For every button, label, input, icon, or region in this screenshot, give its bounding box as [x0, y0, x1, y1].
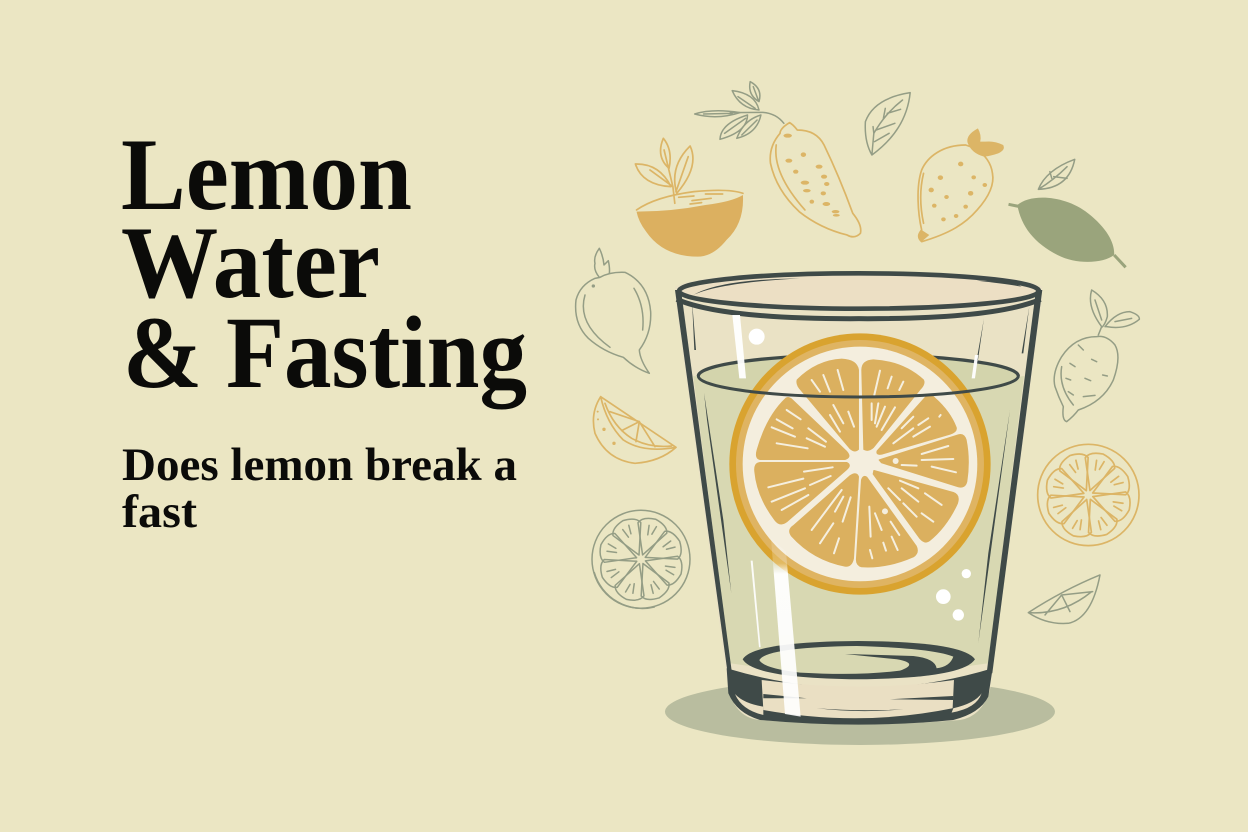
- water: [693, 376, 1024, 673]
- title: Water: [121, 206, 380, 320]
- bubbles: [749, 329, 971, 621]
- left botanical icons: [576, 248, 690, 608]
- icon: small leaf: [1038, 159, 1075, 189]
- glass body: [675, 297, 1042, 724]
- icon: long speckled fruit with leaves: [695, 82, 861, 237]
- title: & Fasting: [123, 296, 527, 410]
- title: [121, 118, 527, 410]
- icon: half lemon with sprout: [635, 138, 743, 257]
- icon: lemon with leaves: [1054, 290, 1139, 422]
- water surface front edge: [698, 376, 1018, 397]
- icon: orange slice outline: [1038, 444, 1139, 546]
- subtitle: [122, 439, 517, 538]
- lemon slice: [729, 333, 991, 595]
- subtitle: fast: [122, 486, 197, 538]
- glass outer walls: [675, 290, 1042, 673]
- icon: solid green leaf: [1009, 198, 1126, 267]
- right botanical icons: [1028, 290, 1139, 623]
- glass base: [727, 668, 993, 725]
- subtitle: Does lemon break a: [122, 439, 517, 491]
- water surface back edge: [698, 355, 1018, 376]
- icon: strawberry shaped fruit: [918, 128, 1004, 242]
- lemon segments: [755, 359, 968, 567]
- glass bottom oval: [743, 641, 975, 679]
- glass shadow: [665, 678, 1055, 745]
- title: Lemon: [121, 118, 412, 232]
- top botanical icons: [635, 82, 1126, 267]
- icon: lime slice outline: [592, 510, 690, 608]
- glass highlights: [732, 315, 978, 717]
- inner glass shading lines: [692, 300, 1029, 643]
- icon: lemon wedge gold: [593, 397, 676, 463]
- icon: lime wedge outline: [1028, 575, 1100, 623]
- lemon pulp ticks: [768, 370, 956, 558]
- icon: outlined leaf: [865, 93, 910, 155]
- glass rim: [675, 271, 1042, 319]
- icon: pear outline: [576, 248, 651, 373]
- glass of lemon water: [665, 271, 1055, 745]
